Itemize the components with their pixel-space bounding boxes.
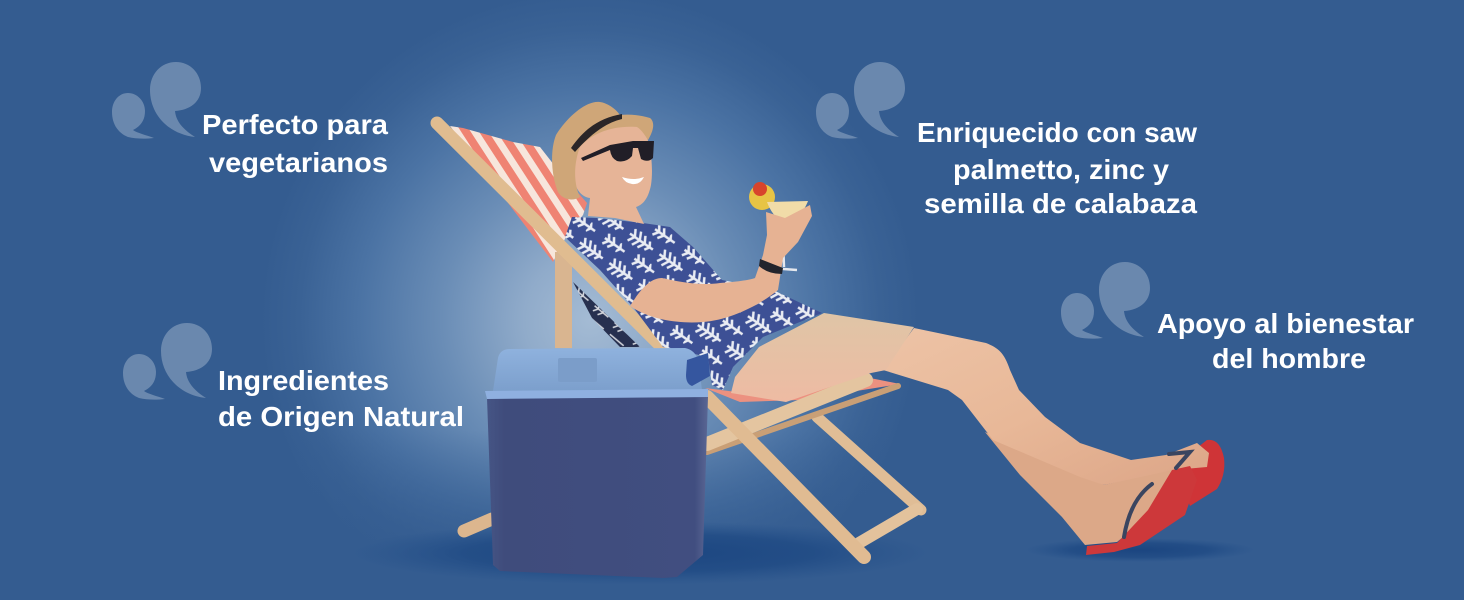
front flip flop: [1086, 466, 1197, 555]
icon: quote mark: [123, 323, 212, 400]
mouth: [622, 177, 644, 184]
icon: quote mark: [112, 62, 201, 139]
floor shadows: [350, 521, 1255, 585]
arm: [630, 205, 812, 322]
chair canvas back: [450, 126, 587, 262]
shorts: [731, 313, 914, 402]
text block: Apoyo al bienestar: [1157, 308, 1414, 339]
back flip flop: [1180, 440, 1224, 506]
quote and text: vegetarianos: [112, 62, 388, 178]
text block: [1157, 308, 1414, 374]
quote and text: saw palmetto: [816, 62, 1197, 219]
cocktail: [749, 182, 808, 270]
front leg: [883, 328, 1209, 485]
watch: [759, 259, 783, 274]
text block: del hombre: [1212, 343, 1366, 374]
text block: [917, 117, 1197, 219]
text block: semilla de calabaza: [924, 188, 1197, 219]
shirt underside: [573, 282, 640, 347]
flip flop straps: [1124, 452, 1190, 537]
deck chair: [437, 123, 921, 557]
text block: [202, 109, 388, 178]
text block: de Origen Natural: [218, 401, 464, 432]
shirt: [565, 217, 822, 390]
hat band: [571, 114, 622, 152]
man: [552, 102, 1224, 555]
neck and head: [574, 124, 652, 224]
chair canvas seat edge: [705, 378, 900, 402]
sunglasses: [581, 141, 654, 161]
text block: Enriquecido con saw: [917, 117, 1197, 148]
straw hat: [552, 102, 653, 199]
text block: [218, 365, 464, 432]
back leg and foot: [985, 432, 1175, 545]
quote and text: bienestar: [1061, 262, 1414, 374]
text block: Perfecto para: [202, 109, 388, 140]
cooler rim: [485, 389, 708, 399]
text block: palmetto, zinc y: [953, 154, 1169, 185]
icon: quote mark: [1061, 262, 1150, 339]
cooler box: [485, 348, 710, 578]
side latch: [686, 353, 710, 386]
quote and text: ingredientes: [123, 323, 464, 432]
lid handle: [558, 358, 597, 382]
icon: quote mark: [816, 62, 905, 139]
text block: vegetarianos: [209, 147, 388, 178]
wooden frame: [437, 123, 921, 557]
cooler body: [487, 397, 708, 578]
cooler lid: [493, 348, 702, 391]
text block: Ingredientes: [218, 365, 389, 396]
